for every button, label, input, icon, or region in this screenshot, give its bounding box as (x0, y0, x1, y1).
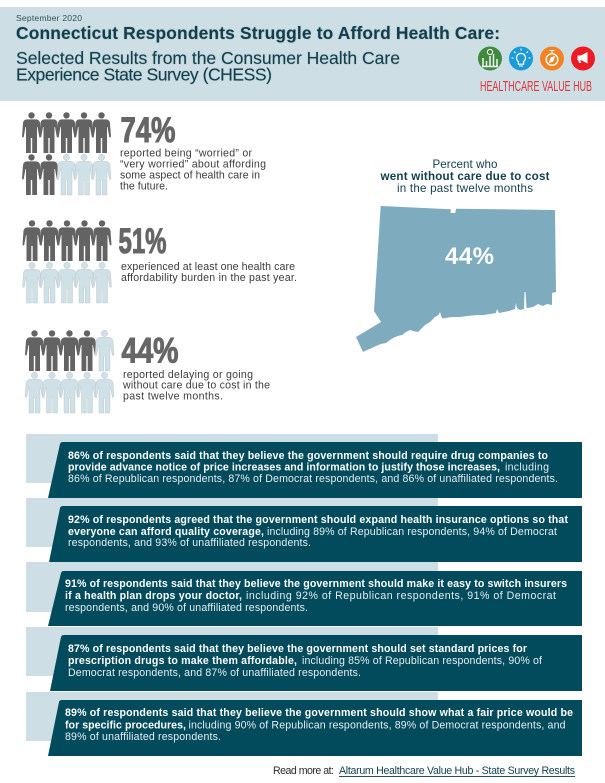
map: Connecticut (356, 206, 556, 352)
map heading: went without care due to cost (380, 170, 550, 183)
finding 1: 86% of Republican respondents, 87% of Democrat respondents, and 86% of unaffiliated respondents. (68, 473, 558, 485)
finding 3: including 92% of Republican respondents, 91% of Democrat (246, 590, 556, 602)
icon: blue lightbulb (509, 46, 533, 70)
finding 4: prescription drugs to make them affordable, (68, 655, 297, 667)
pictogram: 51 percent (22, 220, 112, 303)
finding 5: for specific procedures, (65, 720, 186, 732)
figure: 74%: 74% (120, 111, 176, 150)
description: 51 percent: experienced at least one health care (121, 261, 295, 273)
description: 44 percent: past twelve months. (123, 390, 223, 402)
finding 3: respondents, and 90% of unaffiliated respondents. (65, 602, 308, 614)
date: September 2020 (16, 13, 82, 23)
title: Connecticut Respondents Struggle to Afford Health Care: (16, 23, 500, 43)
finding 2: including 89% of Republican respondents, 94% of Democrat (267, 526, 557, 538)
icon: green chart (478, 46, 502, 70)
finding 2: everyone can afford quality coverage, (68, 526, 264, 538)
finding 3: 91% of respondents said that they believe the government should make it easy to switch insurers (65, 578, 567, 590)
subtitle: Experience State Survey (CHESS) (16, 64, 272, 84)
finding 3: if a health plan drops your doctor, (65, 590, 242, 602)
figure: 44%: 44% (122, 332, 178, 370)
stat: 74 percent (22, 111, 266, 195)
map heading: Percent who (432, 158, 498, 171)
description: 51 percent (121, 261, 297, 284)
finding 4: Democrat respondents, and 87% of unaffiliated respondents. (68, 667, 361, 679)
description: 74 percent (120, 148, 266, 192)
footer link: Read more at: (273, 765, 334, 777)
map value: 44% (445, 243, 494, 270)
pictogram: 44 percent (25, 330, 114, 413)
finding 3 (26, 562, 582, 626)
pictogram: 74 percent (22, 112, 111, 195)
description: 74 percent: the future. (120, 180, 168, 192)
figure: 51%: 51% (118, 222, 166, 261)
finding 4: 87% of respondents said that they believe the government should set standard prices for (68, 643, 527, 655)
finding 2: 92% of respondents agreed that the government should expand health insurance options so that (68, 514, 568, 526)
description: 44 percent: reported delaying or going (123, 369, 253, 381)
finding 5: 89% of respondents said that they believe the government should show what a fair price would be (65, 707, 573, 719)
finding 2: respondents, and 93% of unaffiliated respondents. (68, 537, 311, 549)
finding 5: 89% of unaffiliated respondents. (65, 731, 221, 743)
description: 74 percent: “very worried” about affording (120, 158, 266, 170)
description: 44 percent: without care due to cost in the (122, 380, 270, 392)
subtitle: Selected Results from the Consumer Health Care (16, 48, 400, 68)
finding 4 (26, 627, 582, 691)
header panel (0, 7, 605, 101)
map heading: in the past twelve months (397, 182, 533, 195)
finding 1: 86% of respondents said that they believe the government should require drug companies to (68, 450, 549, 462)
finding 4: including 85% of Republican respondents, 90% of (302, 655, 542, 667)
footer link: Altarum Healthcare Value Hub - State Survey Results (339, 765, 575, 777)
description: 51 percent: affordability burden in the past year. (121, 272, 297, 284)
description: 44 percent (122, 369, 270, 402)
finding 1: including (505, 462, 549, 474)
stat: 44 percent (25, 330, 270, 413)
icon: orange compass (540, 46, 564, 70)
finding 1: provide advance notice of price increases and information to justify those increases, (68, 462, 500, 474)
finding 2 (26, 498, 582, 562)
finding 5: including 90% of Republican respondents, 89% of Democrat respondents, and (188, 720, 566, 732)
stat: 51 percent (22, 220, 297, 303)
finding 1 (26, 434, 582, 498)
description: 74 percent: reported being “worried” or (120, 148, 252, 160)
map heading (380, 158, 550, 195)
icon: red megaphone (571, 46, 595, 70)
subtitle (16, 48, 400, 84)
finding 5 (26, 692, 582, 756)
description: 74 percent: some aspect of health care in (120, 170, 260, 182)
